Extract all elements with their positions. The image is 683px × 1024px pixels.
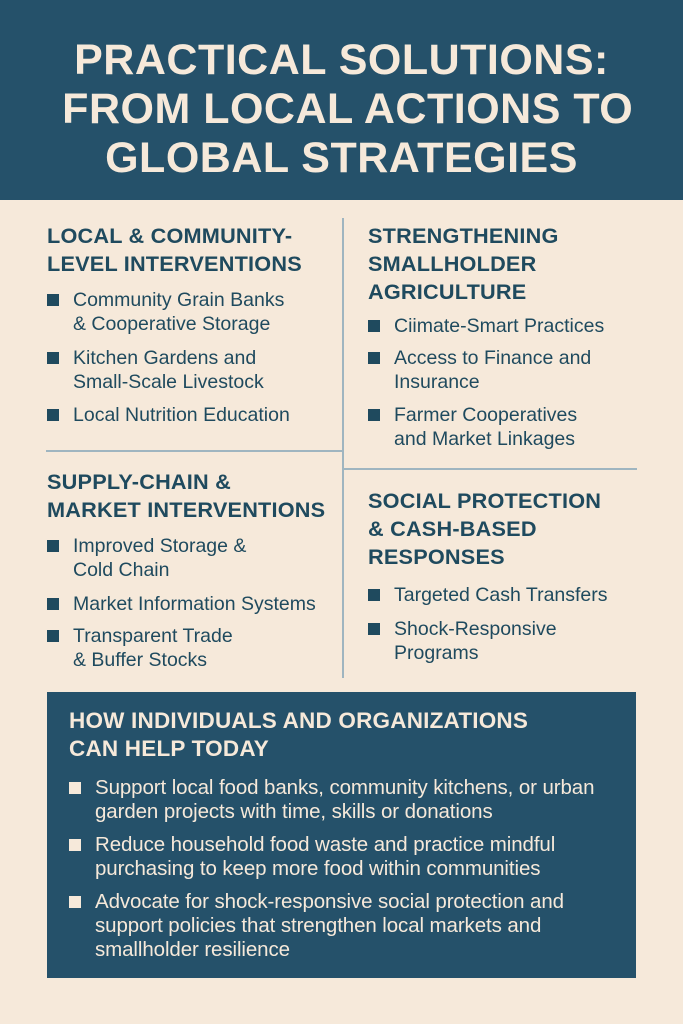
items: supply chain: Cold Chain: [73, 559, 169, 581]
items: supply chain: [47, 535, 316, 671]
items: social protection: Shock-Responsive: [394, 618, 557, 640]
item: advocate: Advocate for shock-responsive social protection and: [95, 890, 564, 913]
items: smallholder: [368, 315, 604, 450]
items: local: Local Nutrition Education: [73, 404, 290, 426]
items: smallholder: Access to Finance and: [394, 347, 591, 369]
heading: supply chain: [47, 469, 325, 522]
heading: local: LOCAL & COMMUNITY-: [47, 223, 292, 248]
item: advocate: smallholder resilience: [95, 938, 290, 961]
heading: supply chain: SUPPLY-CHAIN &: [47, 469, 231, 494]
heading: supply chain: MARKET INTERVENTIONS: [47, 497, 325, 522]
panel: how to help: [47, 692, 636, 978]
heading: how to help: CAN HELP TODAY: [69, 736, 269, 761]
panel: smallholder: [368, 223, 604, 450]
panel: social protection: [368, 488, 608, 664]
items: smallholder: Insurance: [394, 371, 480, 393]
title: FROM LOCAL ACTIONS TO: [62, 85, 633, 133]
items: local: & Cooperative Storage: [73, 313, 270, 335]
items: supply chain: Improved Storage &: [73, 535, 246, 557]
items: social protection: Programs: [394, 642, 479, 664]
heading: local: LEVEL INTERVENTIONS: [47, 251, 302, 276]
title: [62, 36, 633, 182]
item: support: [69, 776, 594, 824]
item: support: garden projects with time, skills or donations: [95, 800, 493, 823]
items: local: Community Grain Banks: [73, 289, 284, 311]
heading: social protection: SOCIAL PROTECTION: [368, 488, 601, 513]
items: social protection: [368, 584, 608, 664]
heading: social protection: RESPONSES: [368, 544, 505, 569]
heading: social protection: [368, 488, 601, 569]
items: supply chain: Market Information Systems: [73, 593, 316, 615]
item: advocate: [69, 890, 564, 962]
items: social protection: Targeted Cash Transfers: [394, 584, 608, 606]
title: GLOBAL STRATEGIES: [105, 134, 578, 182]
heading: local: [47, 223, 302, 276]
item: reduce: Reduce household food waste and practice mindful: [95, 833, 555, 856]
heading: how to help: HOW INDIVIDUALS AND ORGANIZATIONS: [69, 708, 528, 733]
items: local: Small-Scale Livestock: [73, 371, 264, 393]
items: local: Kitchen Gardens and: [73, 347, 256, 369]
items: supply chain: Transparent Trade: [73, 625, 233, 647]
items: supply chain: & Buffer Stocks: [73, 649, 207, 671]
heading: smallholder: STRENGTHENING: [368, 223, 559, 248]
heading: smallholder: SMALLHOLDER: [368, 251, 536, 276]
item: support: Support local food banks, community kitchens, or urban: [95, 776, 594, 799]
item: advocate: support policies that strengthen local markets and: [95, 914, 541, 937]
heading: social protection: & CASH-BASED: [368, 516, 537, 541]
header band: [0, 0, 683, 200]
items: smallholder: and Market Linkages: [394, 428, 575, 450]
item: reduce: [69, 833, 555, 881]
heading: how to help: [69, 708, 528, 761]
panel: local & community: [47, 223, 302, 426]
panel: supply chain: [47, 469, 325, 671]
items: local: [47, 289, 290, 426]
items: smallholder: Ciimate-Smart Practices: [394, 315, 604, 337]
title: PRACTICAL SOLUTIONS:: [74, 36, 609, 84]
items: smallholder: Farmer Cooperatives: [394, 404, 577, 426]
heading: smallholder: [368, 223, 559, 304]
item: reduce: purchasing to keep more food within communities: [95, 857, 540, 880]
heading: smallholder: AGRICULTURE: [368, 279, 526, 304]
